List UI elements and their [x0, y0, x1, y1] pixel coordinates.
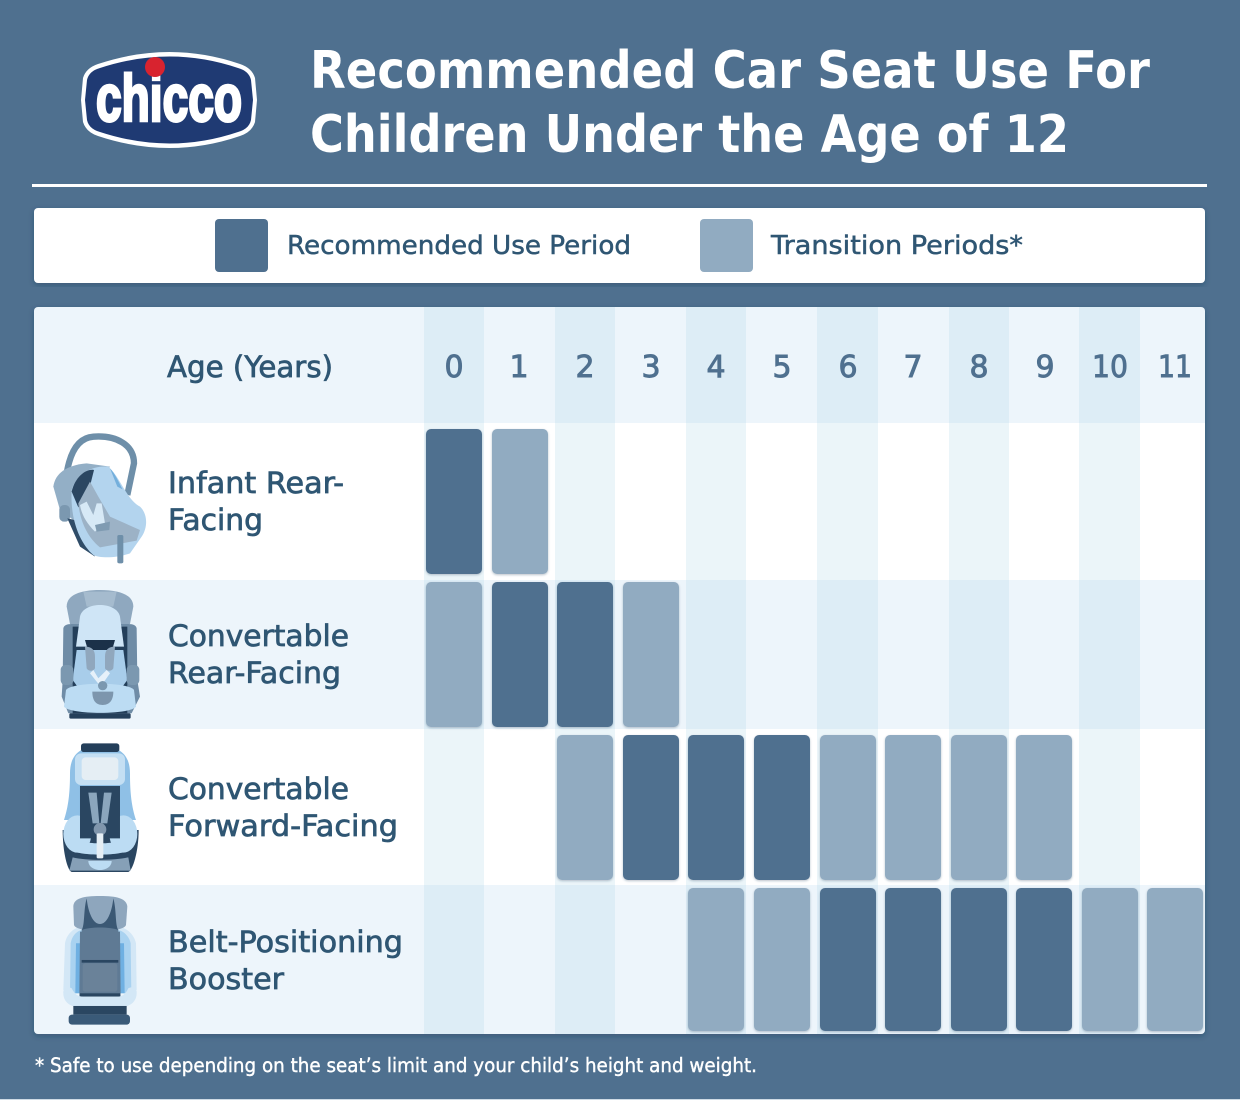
- row: infant rear-facing: [53, 429, 548, 574]
- bars: convertable rear-facing: [426, 582, 679, 727]
- label: convertable rear-facing: [168, 619, 349, 690]
- bars: infant rear-facing: [426, 429, 548, 574]
- label: infant rear-facing: Facing: [168, 503, 263, 537]
- panel: chart table: [34, 307, 1205, 1034]
- label: infant rear-facing: Infant Rear-: [168, 466, 344, 500]
- header: age numbers: 11: [1158, 350, 1192, 385]
- row: convertable forward-facing: [63, 735, 1072, 880]
- alternating column stripes: [424, 307, 1140, 1034]
- title: [310, 41, 1150, 165]
- footnote: * Safe to use depending on the seat’s limit and your child’s height and weight.: [35, 1054, 757, 1077]
- header: age numbers: 1: [509, 350, 529, 385]
- label: convertable rear-facing: Convertable: [168, 619, 349, 653]
- header: age numbers: [444, 350, 1192, 385]
- title: Recommended Car Seat Use For: [310, 41, 1150, 101]
- label: belt-positioning booster: Booster: [168, 962, 284, 996]
- label: infant rear-facing: [168, 466, 344, 537]
- table background rows: [34, 307, 1205, 1034]
- legend label: transition: Transition Periods*: [770, 231, 1023, 261]
- label: convertable rear-facing: Rear-Facing: [168, 656, 341, 690]
- bars: convertable forward-facing: [557, 735, 1072, 880]
- label: convertable forward-facing: Convertable: [168, 772, 349, 806]
- header: age numbers: 9: [1035, 350, 1055, 385]
- label: convertable forward-facing: Forward-Facing: [168, 809, 398, 843]
- header: age label: Age (Years): [167, 350, 333, 384]
- header: age numbers: 3: [641, 350, 661, 385]
- header: age numbers: 7: [903, 350, 923, 385]
- row: belt-positioning booster: [63, 888, 1203, 1031]
- header: age numbers: 2: [575, 350, 595, 385]
- header: age numbers: 8: [969, 350, 989, 385]
- header: age numbers: 0: [444, 350, 464, 385]
- logo: chicco: chicco: [96, 61, 242, 135]
- legend swatch: recommended: [215, 219, 268, 272]
- icon: booster seat: [63, 896, 137, 1025]
- icon: infant carrier seat: [53, 436, 146, 563]
- label: belt-positioning booster: [168, 925, 403, 996]
- icon: convertible forward-facing seat: [63, 743, 139, 872]
- legend swatch: transition: [700, 219, 753, 272]
- panel: legend: [34, 208, 1205, 283]
- label: convertable forward-facing: [168, 772, 398, 843]
- title: Children Under the Age of 12: [310, 105, 1069, 165]
- label: belt-positioning booster: Belt-Positioning: [168, 925, 403, 959]
- header: age numbers: 4: [706, 350, 726, 385]
- header: age numbers: 10: [1092, 350, 1128, 385]
- row: convertable rear-facing: [61, 582, 679, 727]
- header: age numbers: 6: [838, 350, 858, 385]
- logo: chicco: [81, 52, 257, 148]
- bars: belt-positioning booster: [688, 888, 1203, 1031]
- header: age numbers: 5: [772, 350, 792, 385]
- icon: convertible rear-facing seat: [61, 590, 140, 719]
- legend label: recommended: Recommended Use Period: [287, 231, 631, 261]
